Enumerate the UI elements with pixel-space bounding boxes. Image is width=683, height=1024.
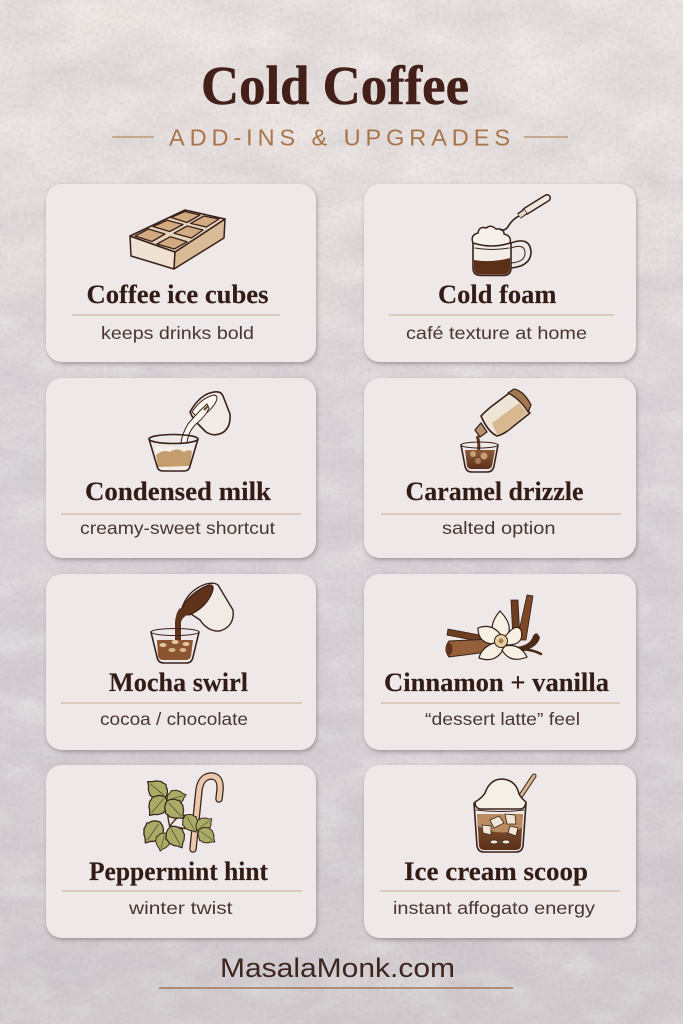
heading: Coffee ice cubes xyxy=(86,280,268,309)
heading: Cold foam xyxy=(438,280,557,309)
heading: Condensed milk xyxy=(85,477,272,506)
icon: pitcher pouring milk into glass xyxy=(149,392,230,471)
panel: caramel drizzle xyxy=(364,378,636,558)
description: cocoa / chocolate xyxy=(100,709,248,729)
description: “dessert latte” feel xyxy=(425,709,580,729)
description: creamy-sweet shortcut xyxy=(80,518,275,538)
icon: cinnamon sticks and vanilla flower xyxy=(446,595,541,660)
description: café texture at home xyxy=(406,323,587,343)
heading: Ice cream scoop xyxy=(404,857,588,886)
description: salted option xyxy=(442,518,556,538)
panel: condensed milk xyxy=(46,378,316,558)
icon: mug with frother xyxy=(472,198,547,276)
description: instant affogato energy xyxy=(393,898,595,918)
icon: pitcher pouring mocha into glass xyxy=(151,583,233,663)
heading: Caramel drizzle xyxy=(406,477,584,506)
panel: ice cream scoop xyxy=(364,765,636,938)
footer: website: MasalaMonk.com xyxy=(220,953,455,983)
icon: iced coffee glass with ice cream scoop xyxy=(474,776,534,852)
panel: mocha swirl xyxy=(46,574,316,750)
icon: ice cube tray xyxy=(130,210,225,269)
panel: peppermint hint xyxy=(46,765,316,938)
heading: Mocha swirl xyxy=(109,668,248,697)
panel: cold foam xyxy=(364,184,636,362)
subtitle with side rules: ADD-INS & UPGRADES xyxy=(169,124,510,150)
panel: coffee ice cubes xyxy=(46,184,316,362)
title: Cold Coffee xyxy=(201,55,469,116)
heading: Peppermint hint xyxy=(89,857,268,886)
heading: Cinnamon + vanilla xyxy=(384,668,609,697)
description: keeps drinks bold xyxy=(101,323,254,343)
icon: mint leaves and candy cane xyxy=(137,774,220,853)
panel: cinnamon + vanilla xyxy=(364,574,636,750)
icon: squeeze bottle over glass xyxy=(461,389,531,472)
description: winter twist xyxy=(128,898,233,918)
